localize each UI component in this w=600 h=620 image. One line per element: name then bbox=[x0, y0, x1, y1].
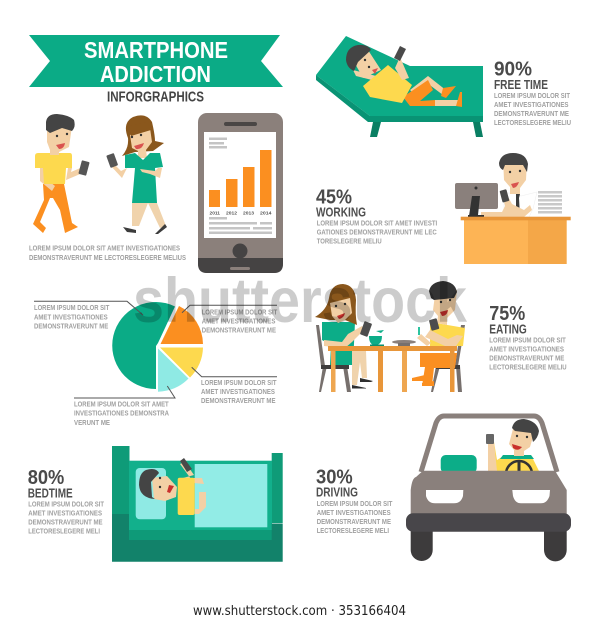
stat: free time bbox=[494, 59, 571, 127]
pie chart bbox=[112, 302, 203, 392]
illustration: man with phone bbox=[33, 114, 90, 233]
stat: working: TORESLEGERE MELIU bbox=[317, 237, 382, 246]
stat: bedtime: LOREM IPSUM DOLOR SIT bbox=[28, 499, 104, 508]
stat: free time: LOREM IPSUM DOLOR SIT bbox=[494, 91, 570, 100]
illustration: man working at desk bbox=[455, 153, 571, 264]
chart: yearly bars: 2014 bbox=[260, 210, 272, 216]
title banner: ADDICTION bbox=[100, 61, 211, 87]
chart: yearly bars: 2012 bbox=[226, 210, 238, 216]
pie label: yellow slice: LOREM IPSUM DOLOR SIT bbox=[201, 378, 277, 387]
illustration: man in bed bbox=[112, 446, 283, 562]
stat: working: LOREM IPSUM DOLOR SIT AMET INVESTI bbox=[317, 219, 437, 228]
stat: working: 45% bbox=[316, 187, 352, 209]
stat: eating: 75% bbox=[489, 303, 525, 325]
stat: bedtime: DEMONSTRAVERUNT ME bbox=[28, 518, 103, 527]
chart: yearly bars bbox=[209, 150, 272, 216]
stat: driving: LOREM IPSUM DOLOR SIT bbox=[317, 499, 393, 508]
pie label: orange slice: DEMONSTRAVERUNT ME bbox=[202, 325, 276, 334]
stat: bedtime: LECTORESLEGERE MELI bbox=[28, 527, 100, 536]
stat: eating: DEMONSTRAVERUNT ME bbox=[489, 354, 564, 363]
stat: bedtime bbox=[28, 467, 104, 536]
illustration: woman with phone bbox=[106, 115, 167, 234]
stat: eating: LECTORESLEGERE MELIU bbox=[489, 362, 567, 372]
stat: eating bbox=[489, 303, 567, 372]
chart: yearly bars: 2013 bbox=[243, 210, 255, 216]
smartphone with bar chart bbox=[198, 113, 283, 273]
stat: driving: AMET INVESTIGATIONES bbox=[317, 508, 391, 517]
text: intro description: DEMONSTRAVERUNT ME LECTORESLEGERE MELIUS bbox=[29, 253, 186, 262]
title banner: SMARTPHONE bbox=[84, 37, 228, 63]
chairs bbox=[316, 325, 465, 392]
stat: working bbox=[316, 187, 437, 246]
tabletop items bbox=[369, 336, 382, 345]
pie label: teal slice: LOREM IPSUM DOLOR SIT bbox=[34, 303, 110, 312]
stat: driving bbox=[316, 466, 393, 535]
pie label: cyan slice: VERUNT ME bbox=[74, 418, 110, 427]
stat: driving: DEMONSTRAVERUNT ME bbox=[317, 517, 391, 526]
stat: driving: DRIVING bbox=[316, 486, 358, 500]
stat: free time: 90% bbox=[494, 59, 532, 81]
pie label: cyan slice: LOREM IPSUM DOLOR SIT AMET bbox=[74, 400, 169, 409]
stat: eating: EATING bbox=[489, 322, 527, 336]
text: intro description bbox=[29, 244, 186, 262]
illustration: man on lounge chair bbox=[316, 36, 483, 137]
stat: working: GATIONES DEMONSTRAVERUNT ME LEC bbox=[317, 228, 437, 237]
pie label: cyan slice: INVESTIGATIONES DEMONSTRA bbox=[74, 409, 170, 418]
pie label: yellow slice bbox=[201, 378, 277, 405]
stat: free time: LECTORESLEGERE MELIU bbox=[494, 118, 571, 127]
stat: bedtime: AMET INVESTIGATIONES bbox=[28, 508, 102, 517]
woman bbox=[322, 322, 355, 365]
footer credit: www.shutterstock.com · 353166404 bbox=[193, 603, 406, 619]
man bbox=[430, 322, 465, 346]
table bbox=[328, 346, 457, 351]
title banner bbox=[29, 35, 283, 87]
stat: driving: 30% bbox=[316, 466, 353, 488]
stat: eating: AMET INVESTIGATIONES bbox=[489, 345, 564, 354]
stat: bedtime: 80% bbox=[28, 467, 64, 489]
subtitle: INFORGRAPHICS bbox=[107, 88, 204, 106]
stat: bedtime: BEDTIME bbox=[28, 486, 73, 500]
chart: yearly bars: 2011 bbox=[210, 210, 221, 216]
pie label: yellow slice: DEMONSTRAVERUNT ME bbox=[201, 396, 276, 405]
pie label: yellow slice: AMET INVESTIGATIONES bbox=[201, 387, 275, 396]
stat: working: WORKING bbox=[316, 206, 366, 220]
illustration: car with driver bbox=[406, 416, 571, 561]
pie label: orange slice bbox=[202, 307, 278, 334]
pie label: cyan slice bbox=[74, 400, 170, 427]
stat: driving: LECTORESLEGERE MELI bbox=[317, 526, 389, 535]
stat: free time: AMET INVESTIGATIONES bbox=[494, 100, 569, 109]
stat: eating: LOREM IPSUM DOLOR SIT bbox=[489, 335, 566, 344]
illustration: couple eating at table bbox=[315, 281, 465, 392]
stat: free time: FREE TIME bbox=[494, 78, 548, 92]
pie callout lines bbox=[34, 301, 277, 398]
watermark: shutterstock bbox=[133, 266, 468, 336]
pie label: teal slice bbox=[34, 303, 110, 330]
pie label: orange slice: LOREM IPSUM DOLOR SIT bbox=[202, 307, 278, 316]
stat: free time: DEMONSTRAVERUNT ME bbox=[494, 109, 569, 118]
pie label: orange slice: AMET INVESTIGATIONES bbox=[202, 316, 275, 325]
pie label: teal slice: AMET INVESTIGATIONES bbox=[34, 312, 108, 321]
pie label: teal slice: DEMONSTRAVERUNT ME bbox=[34, 321, 108, 330]
text: intro description: LOREM IPSUM DOLOR SIT AMET INVESTIGATIONES bbox=[29, 244, 180, 252]
